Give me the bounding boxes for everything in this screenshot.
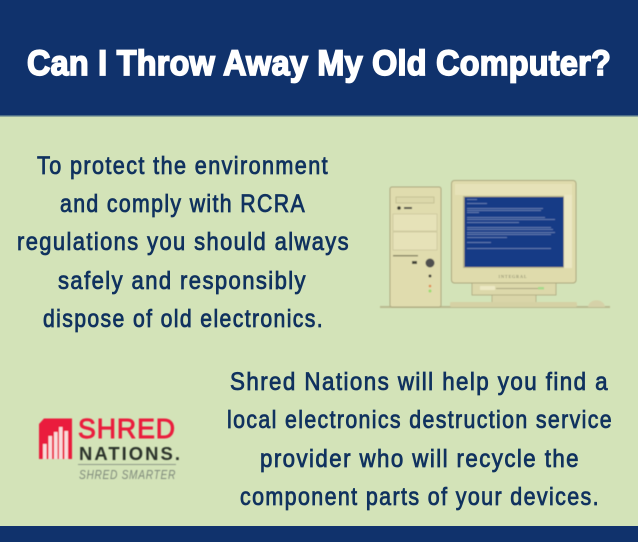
monitor brand label: INTEGRAL [499,274,527,279]
footer band [0,526,638,542]
logo: Shred Nations [39,413,182,482]
text block: environment advice: To protect the environment [37,152,329,180]
text block: environment advice: and comply with RCRA [60,190,306,218]
blue screen [464,197,564,267]
mouse [588,300,605,307]
text block: Shred Nations service [227,368,613,511]
text block: environment advice: dispose of old electronics. [43,305,324,333]
monitor [452,180,576,283]
text block: environment advice: regulations you should always [17,228,350,256]
logo tagline: SHRED SMARTER [79,468,176,482]
text block: environment advice [17,152,350,333]
desk line [380,306,610,308]
header band [0,0,638,116]
logo icon: red bar chart document [39,418,72,459]
text block: environment advice: safely and responsibly [58,267,307,295]
text block: Shred Nations service: provider who will recycle the [260,445,580,473]
logo wordmark: SHRED [78,413,176,444]
monitor stand [472,283,556,303]
illustration: old desktop computer [380,180,610,308]
computer tower [390,187,441,307]
keyboard [450,302,577,307]
logo: Shred Nations: NATIONS. [79,444,182,464]
